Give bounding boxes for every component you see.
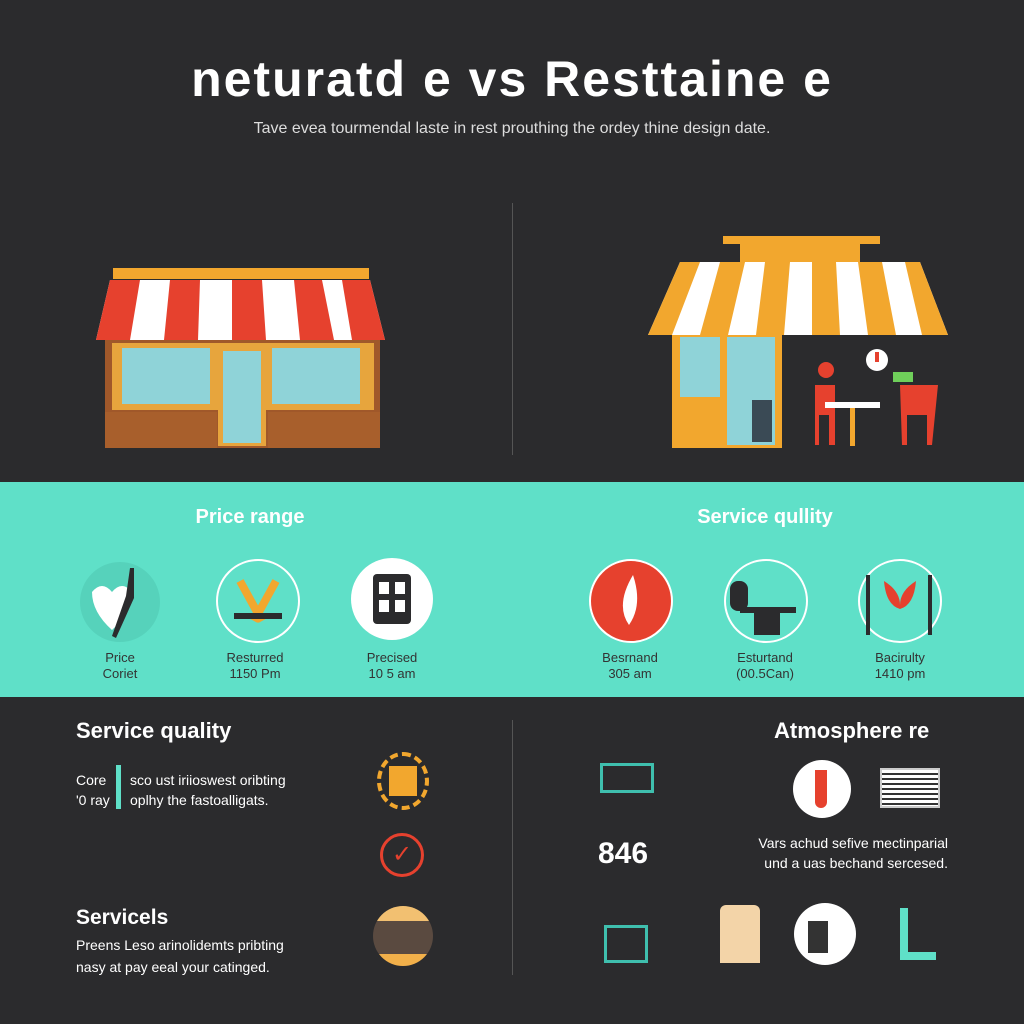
teal band: Resturred: [226, 650, 284, 665]
labels right: [602, 650, 658, 681]
icon: red flame: [589, 559, 673, 643]
icon: heart fork: [80, 562, 160, 642]
heading: servicels: Servicels: [76, 906, 168, 929]
teal band: 1150 Pm: [229, 666, 281, 681]
labels right: Besrnand: [602, 650, 658, 665]
icon: armchair: [720, 905, 760, 963]
icon: x utensils: [216, 559, 300, 643]
labels left: Coriet: [103, 666, 137, 681]
icon: circle chair: [794, 903, 856, 965]
text block: core: '0 ray: [76, 792, 110, 808]
icon: lantern: [351, 558, 433, 640]
teal band: (00.5Can): [736, 666, 794, 681]
icon: teal chair: [900, 908, 936, 960]
icon: bottle: [793, 760, 851, 818]
text block: services: nasy at pay eeal your catinged.: [76, 959, 270, 975]
top divider: [512, 203, 513, 455]
icon: envelope: [600, 763, 654, 793]
text block: core: Core: [76, 772, 106, 788]
teal band: Bacirulty: [875, 650, 925, 665]
icon: calendar: [604, 925, 648, 963]
labels right: 305 am: [608, 666, 652, 681]
subtitle: Tave evea tourmendal laste in rest prouthing the ordey thine design date.: [254, 120, 770, 137]
teal band: [0, 482, 1024, 697]
labels left: Price: [105, 650, 135, 665]
text block: atmosphere: und a uas bechand sercesed.: [764, 855, 948, 871]
teal band: Esturtand: [737, 650, 793, 665]
illustration: left store: [96, 268, 385, 448]
icon: butterfly cutlery: [858, 559, 942, 643]
text block: atmosphere: Vars achud sefive mectinparial: [758, 835, 948, 851]
heading: price range: Price range: [196, 506, 304, 528]
text block: services: [76, 937, 284, 975]
number 846: 846: [598, 837, 648, 870]
heading: service quality: Service qullity: [697, 506, 833, 528]
icon: newspaper: [880, 768, 940, 808]
text: oplhy the fastoalligats.: [130, 792, 269, 808]
icon: check: ✓: [392, 841, 412, 868]
text block: core: [76, 772, 110, 808]
icon: check: [380, 833, 424, 877]
icon: yellow circle: [377, 752, 429, 810]
icon: dark circle: [373, 906, 433, 966]
bottom divider: [512, 720, 513, 975]
heading: service quality: Service quality: [76, 718, 231, 743]
teal band: 10 5 am: [368, 666, 415, 681]
title: neturatd e vs Resttaine e: [191, 51, 833, 107]
illustration: right restaurant: [648, 236, 948, 448]
text: sco ust iriioswest oribting: [130, 772, 286, 788]
text block: services: Preens Leso arinolidemts pribting: [76, 937, 284, 953]
text block: atmosphere: [758, 835, 948, 871]
teal band: 1410 pm: [875, 666, 925, 681]
icon: table chairs: [724, 559, 808, 643]
teal band: Precised: [367, 650, 417, 665]
labels left: [103, 650, 138, 681]
heading: atmosphere: Atmosphere re: [774, 718, 929, 743]
